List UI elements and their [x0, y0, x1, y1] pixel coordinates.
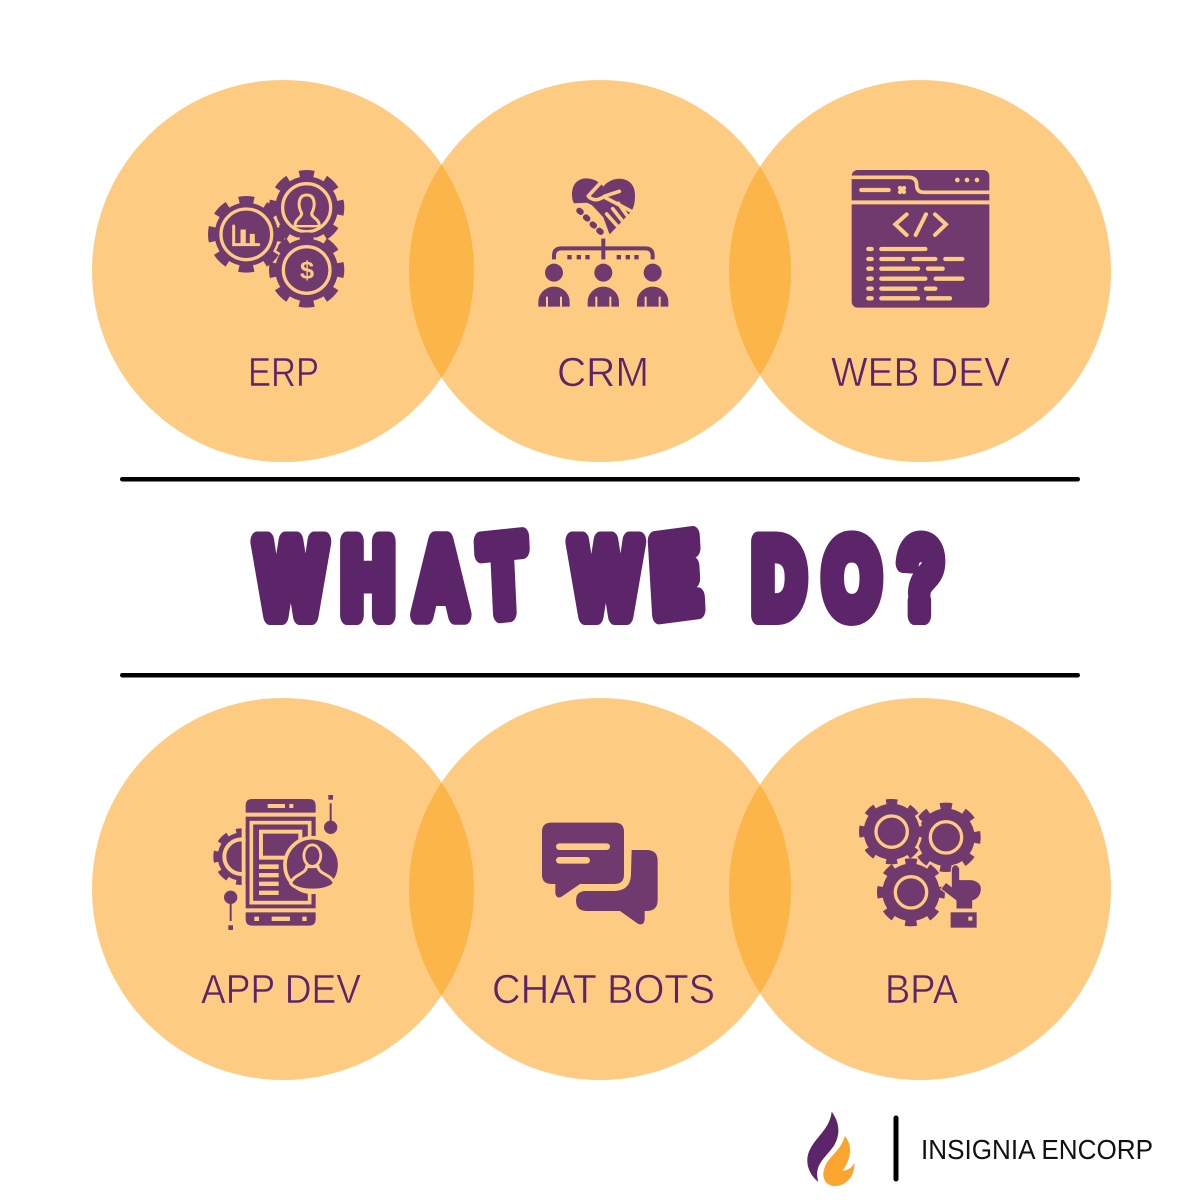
circle: BPA — [729, 698, 1111, 1080]
label: CRM: CRM — [557, 349, 649, 395]
brand name: INSIGNIA ENCORP — [921, 1134, 1153, 1165]
icon: process automation gears and hand — [861, 801, 981, 928]
panel: bottom row of services — [92, 698, 1111, 1080]
icon: web browser with code — [852, 170, 989, 308]
circle: ERP — [92, 80, 474, 462]
circle: WEB DEV — [729, 80, 1111, 462]
circle: CRM — [409, 80, 791, 462]
icon: ERP gears — [212, 174, 341, 304]
icon: mobile app with user — [216, 795, 340, 930]
label: CHAT BOTS: CHAT BOTS — [492, 966, 715, 1012]
title: WHAT WE DO? — [257, 514, 943, 638]
footer: logo and brand — [807, 1112, 1153, 1186]
divider: bottom rule — [120, 673, 1080, 678]
panel: top row of services — [92, 80, 1111, 462]
divider: logo separator — [894, 1116, 898, 1182]
label: APP DEV: APP DEV — [201, 966, 362, 1012]
icon: CRM handshake heart and team tree — [538, 178, 668, 307]
icon: chat bubbles — [542, 823, 658, 924]
label: BPA: BPA — [885, 966, 959, 1012]
icon: ERP gears: $ — [300, 257, 314, 285]
divider: top rule — [120, 477, 1080, 482]
icon: flame logo — [807, 1112, 854, 1186]
circle: APP DEV — [92, 698, 474, 1080]
label: ERP: ERP — [248, 349, 319, 395]
circle: CHAT BOTS — [409, 698, 791, 1080]
label: WEB DEV: WEB DEV — [831, 349, 1011, 395]
